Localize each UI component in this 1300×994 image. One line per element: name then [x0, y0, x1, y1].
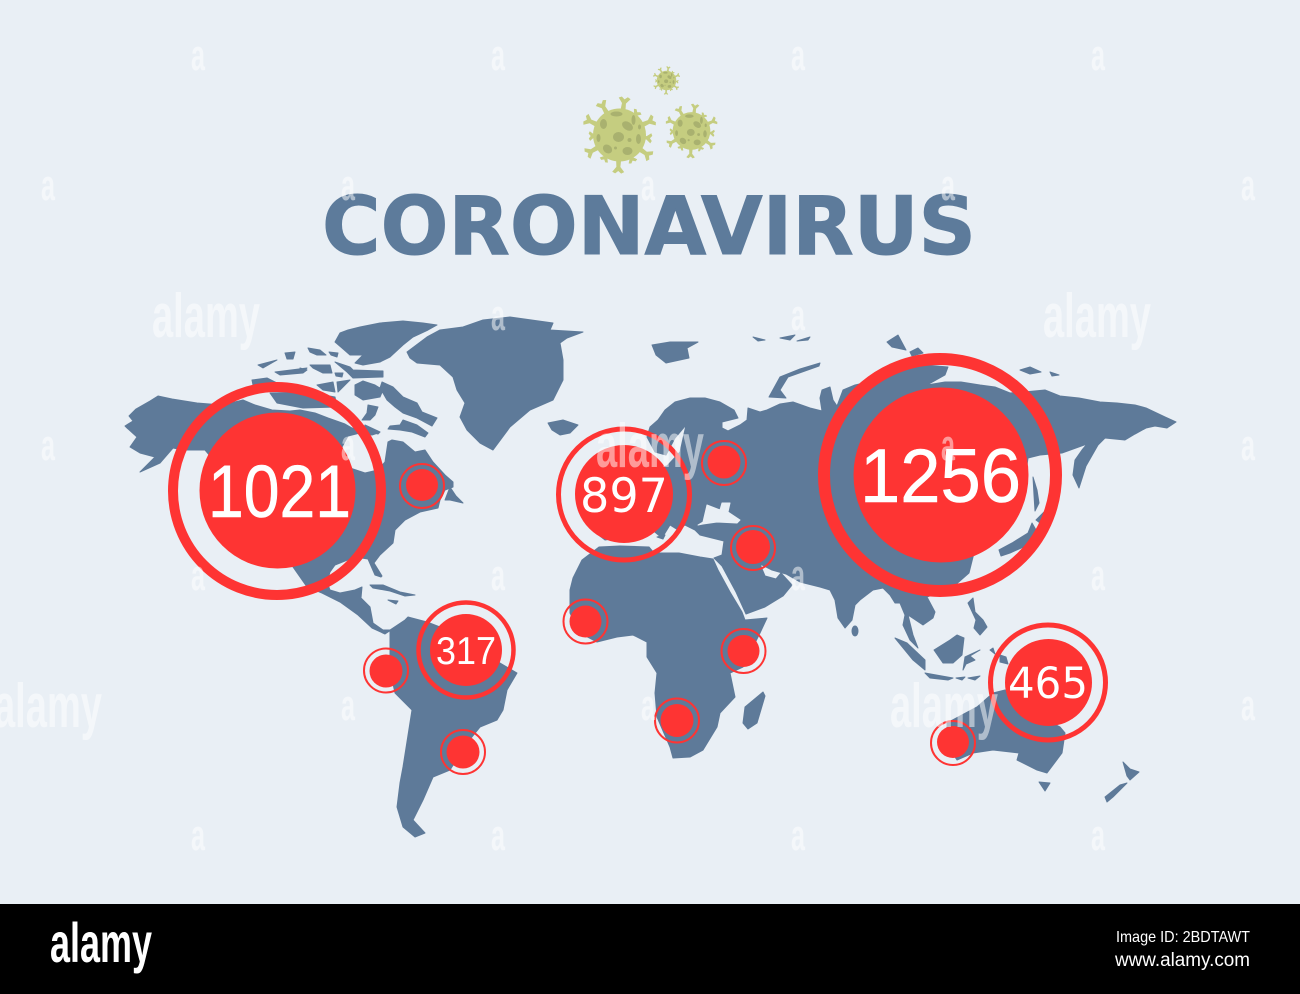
marker: Peru — [364, 648, 408, 692]
icon: medium virus — [665, 103, 718, 158]
watermarks: a — [791, 31, 805, 80]
Africa — [570, 546, 767, 758]
watermarks: a — [641, 681, 655, 730]
marker: eastern Europe — [702, 441, 746, 485]
watermarks: alamy — [890, 672, 998, 741]
marker: East Africa — [722, 629, 766, 673]
website: www.alamy.com — [1114, 950, 1250, 971]
watermarks: a — [191, 811, 205, 860]
marker: South America 317 — [418, 602, 514, 698]
marker: Australia 465 — [990, 625, 1106, 740]
marker: North America 1021: 1021 — [208, 450, 351, 533]
marker: Asia 1256 — [824, 359, 1056, 591]
watermarks: alamy — [152, 282, 260, 351]
watermarks: a — [341, 681, 355, 730]
watermarks: a — [1241, 161, 1255, 210]
Black Sea — [698, 503, 740, 525]
watermarks: a — [791, 551, 805, 600]
Eurasian islands — [652, 335, 1059, 556]
watermarks: a — [191, 551, 205, 600]
icon: large virus — [582, 96, 657, 174]
Eurasia — [592, 365, 1176, 648]
watermarks: a — [341, 421, 355, 470]
Arctic islands — [252, 321, 437, 437]
watermarks: a — [941, 161, 955, 210]
Madagascar — [743, 692, 765, 729]
watermarks: a — [1241, 421, 1255, 470]
watermarks: a — [491, 811, 505, 860]
South America — [390, 617, 517, 837]
North America — [125, 396, 453, 634]
watermarks: a — [491, 31, 505, 80]
watermarks: a — [491, 291, 505, 340]
marker: Asia 1256: 1256 — [860, 434, 1021, 519]
watermarks: a — [941, 421, 955, 470]
Tasmania — [1039, 782, 1050, 791]
watermarks: a — [1091, 551, 1105, 600]
South-East Asia and Indonesia — [895, 598, 1008, 680]
watermarks: a — [1091, 811, 1105, 860]
marker: Southern Africa — [655, 698, 699, 742]
icons: three virus particles — [582, 66, 718, 174]
Sri Lanka — [852, 626, 858, 636]
watermarks: alamy — [1043, 282, 1151, 351]
marker: West Africa — [564, 600, 608, 644]
watermarks: a — [491, 551, 505, 600]
marker: Europe 897: 897 — [580, 469, 668, 524]
case markers — [173, 359, 1106, 774]
footer logo: alamy — [50, 911, 152, 974]
Australia — [947, 690, 1065, 773]
image id: Image ID: 2BDTAWT — [1116, 929, 1250, 946]
watermarks: a — [1091, 31, 1105, 80]
footer bar — [0, 904, 1300, 994]
watermarks: a — [41, 421, 55, 470]
New Zealand — [1105, 762, 1139, 802]
Newfoundland and Caribbean — [370, 487, 463, 604]
watermarks: alamy — [596, 412, 704, 481]
Iceland — [548, 420, 578, 435]
marker: Middle East — [731, 526, 775, 570]
marker: Australia 465: 465 — [1008, 659, 1088, 709]
marker: North America 1021 — [173, 387, 381, 595]
icon: small virus — [653, 66, 680, 95]
watermarks: a — [641, 161, 655, 210]
watermarks: a — [791, 811, 805, 860]
title: CORONAVIRUS — [322, 180, 976, 273]
world map — [125, 317, 1176, 837]
watermarks: a — [191, 31, 205, 80]
marker: Argentina — [441, 730, 485, 774]
watermarks: a — [791, 291, 805, 340]
watermarks: a — [341, 161, 355, 210]
watermarks: a — [1241, 681, 1255, 730]
Greenland — [407, 317, 583, 450]
marker: Europe 897 — [558, 429, 690, 560]
marker: eastern North America — [400, 464, 444, 508]
watermarks: a — [41, 161, 55, 210]
marker: South America 317: 317 — [436, 630, 496, 673]
marker: Western Australia — [931, 721, 975, 765]
